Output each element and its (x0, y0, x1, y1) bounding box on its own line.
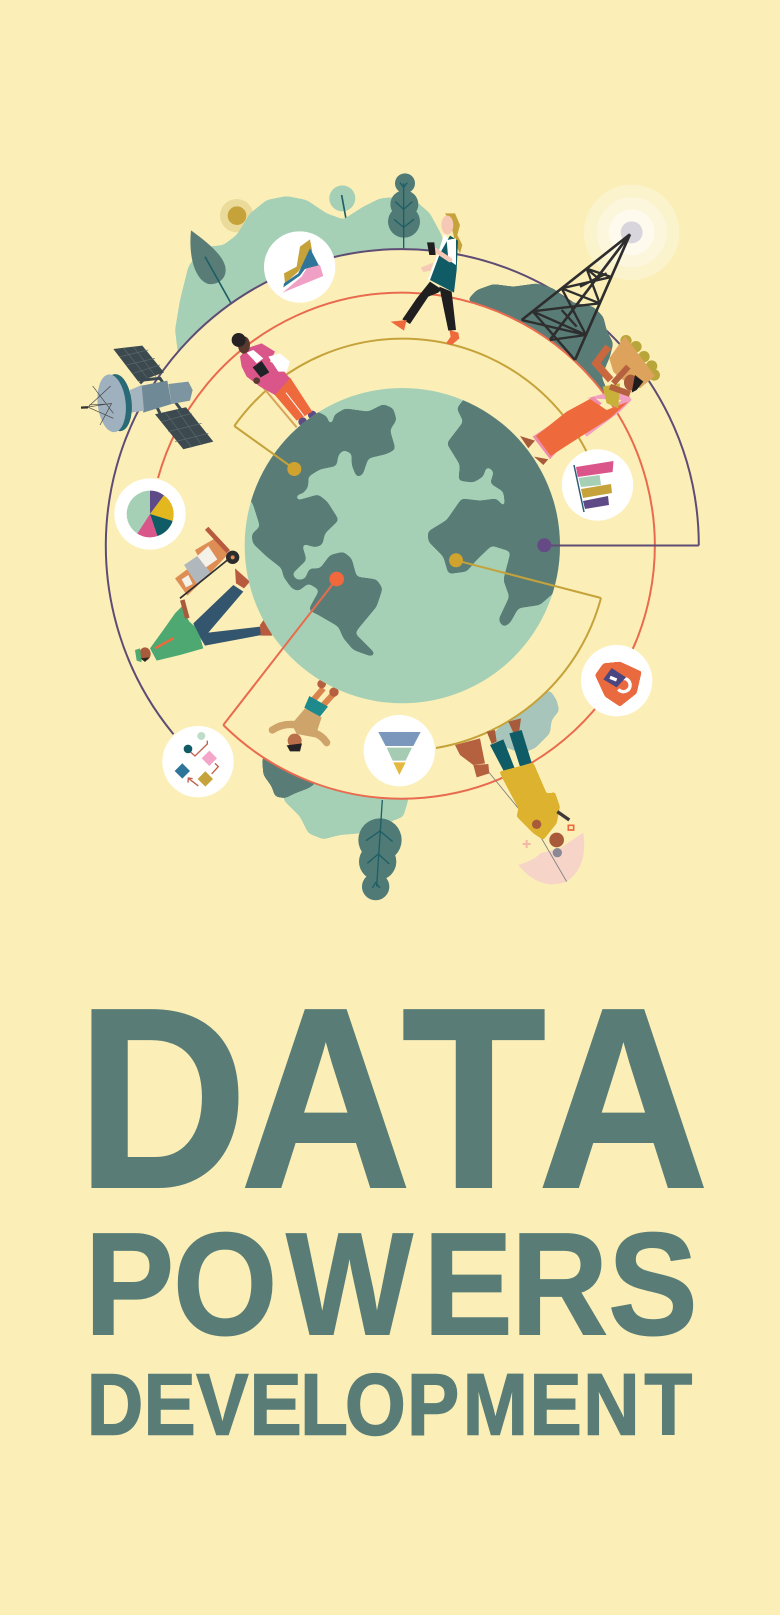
icon: area chart (264, 231, 335, 303)
radio signal glow (584, 185, 679, 280)
person: woman in pink with tablet (232, 333, 317, 427)
illustration: globe with data rings (81, 173, 699, 900)
inner disc covering grey hill (196, 340, 608, 752)
hill: grey (490, 690, 559, 753)
person: woman walking with phone (391, 213, 462, 345)
satellite (81, 346, 213, 449)
connector: purple line and dot (537, 538, 699, 552)
bottom tree (358, 800, 402, 900)
icon: bar chart (562, 449, 633, 521)
title line: POWERS: POWERS (85, 1202, 698, 1366)
person: woman carrying basket (520, 335, 660, 465)
person: boy (272, 680, 339, 751)
icon: pie chart (114, 478, 186, 550)
connector: gold line and dot, top left (234, 426, 301, 476)
person: man with hand truck (135, 528, 272, 662)
connector: gold line and dot, right (449, 553, 601, 598)
hills: bottom (262, 750, 408, 839)
icon: lock shield (581, 645, 652, 716)
globe (244, 388, 560, 704)
icon: flow diagram (162, 726, 234, 797)
small round tree (329, 185, 355, 219)
radio tower (522, 234, 630, 360)
purple data ring (106, 249, 699, 734)
person: man in yellow raincoat (455, 718, 584, 884)
red data ring (158, 293, 655, 799)
title line: DEVELOPMENT: DEVELOPMENT (87, 1355, 692, 1453)
top tree (388, 173, 420, 248)
hill: right dark (467, 283, 613, 393)
inner disc covering hills (149, 292, 655, 798)
sun (220, 199, 253, 232)
leaf tree (190, 230, 231, 303)
icon: funnel (364, 715, 435, 786)
sky disc covering inner hill (106, 249, 699, 842)
gold data ring (234, 339, 601, 748)
continents (233, 387, 587, 657)
connector: red line and dot (223, 572, 344, 725)
title (77, 956, 709, 1453)
title line: DATA: DATA (77, 956, 709, 1242)
hill: top light green (175, 196, 450, 370)
